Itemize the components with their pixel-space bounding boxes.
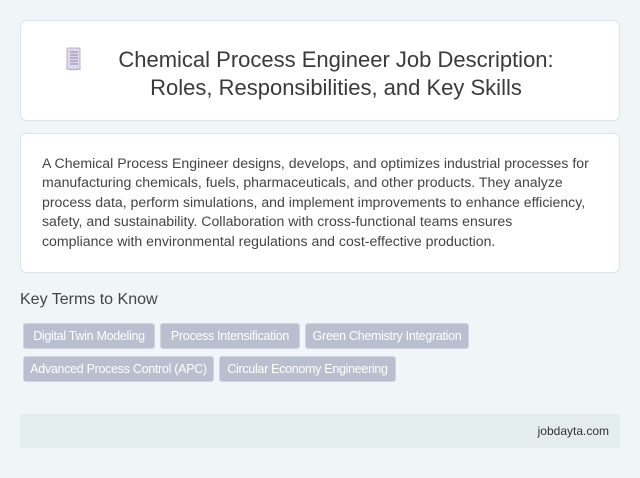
tag: Circular Economy Engineering [227, 362, 388, 376]
heading: key terms: Key Terms to Know [20, 291, 158, 308]
tag: Process Intensification [171, 329, 289, 343]
tag [305, 323, 469, 349]
description text: safety, and sustainability. Collaboration with cross-functional teams ensures [42, 213, 512, 229]
tag: Advanced Process Control (APC) [30, 362, 207, 376]
description text [42, 155, 589, 249]
icon: document [66, 48, 81, 70]
description text: compliance with environmental regulations and cost-effective production. [42, 233, 495, 249]
description text: process data, perform simulations, and implement improvements to enhance efficiency, [42, 194, 585, 210]
footer [20, 414, 620, 448]
tag [23, 323, 155, 349]
tag [23, 356, 214, 382]
description text: manufacturing chemicals, fuels, pharmaceuticals, and other products. They analyze [42, 174, 563, 190]
title: Roles, Responsibilities, and Key Skills [150, 75, 522, 100]
footer text: jobdayta.com [538, 424, 609, 438]
header card [20, 20, 620, 121]
tag: Digital Twin Modeling [33, 329, 145, 343]
description text: A Chemical Process Engineer designs, develops, and optimizes industrial processes for [42, 155, 589, 171]
tag [219, 356, 396, 382]
tag: Green Chemistry Integration [313, 329, 461, 343]
title: Chemical Process Engineer Job Description: [118, 47, 554, 72]
tag [160, 323, 300, 349]
tags [23, 323, 469, 382]
description card [20, 133, 620, 273]
title [118, 47, 554, 100]
